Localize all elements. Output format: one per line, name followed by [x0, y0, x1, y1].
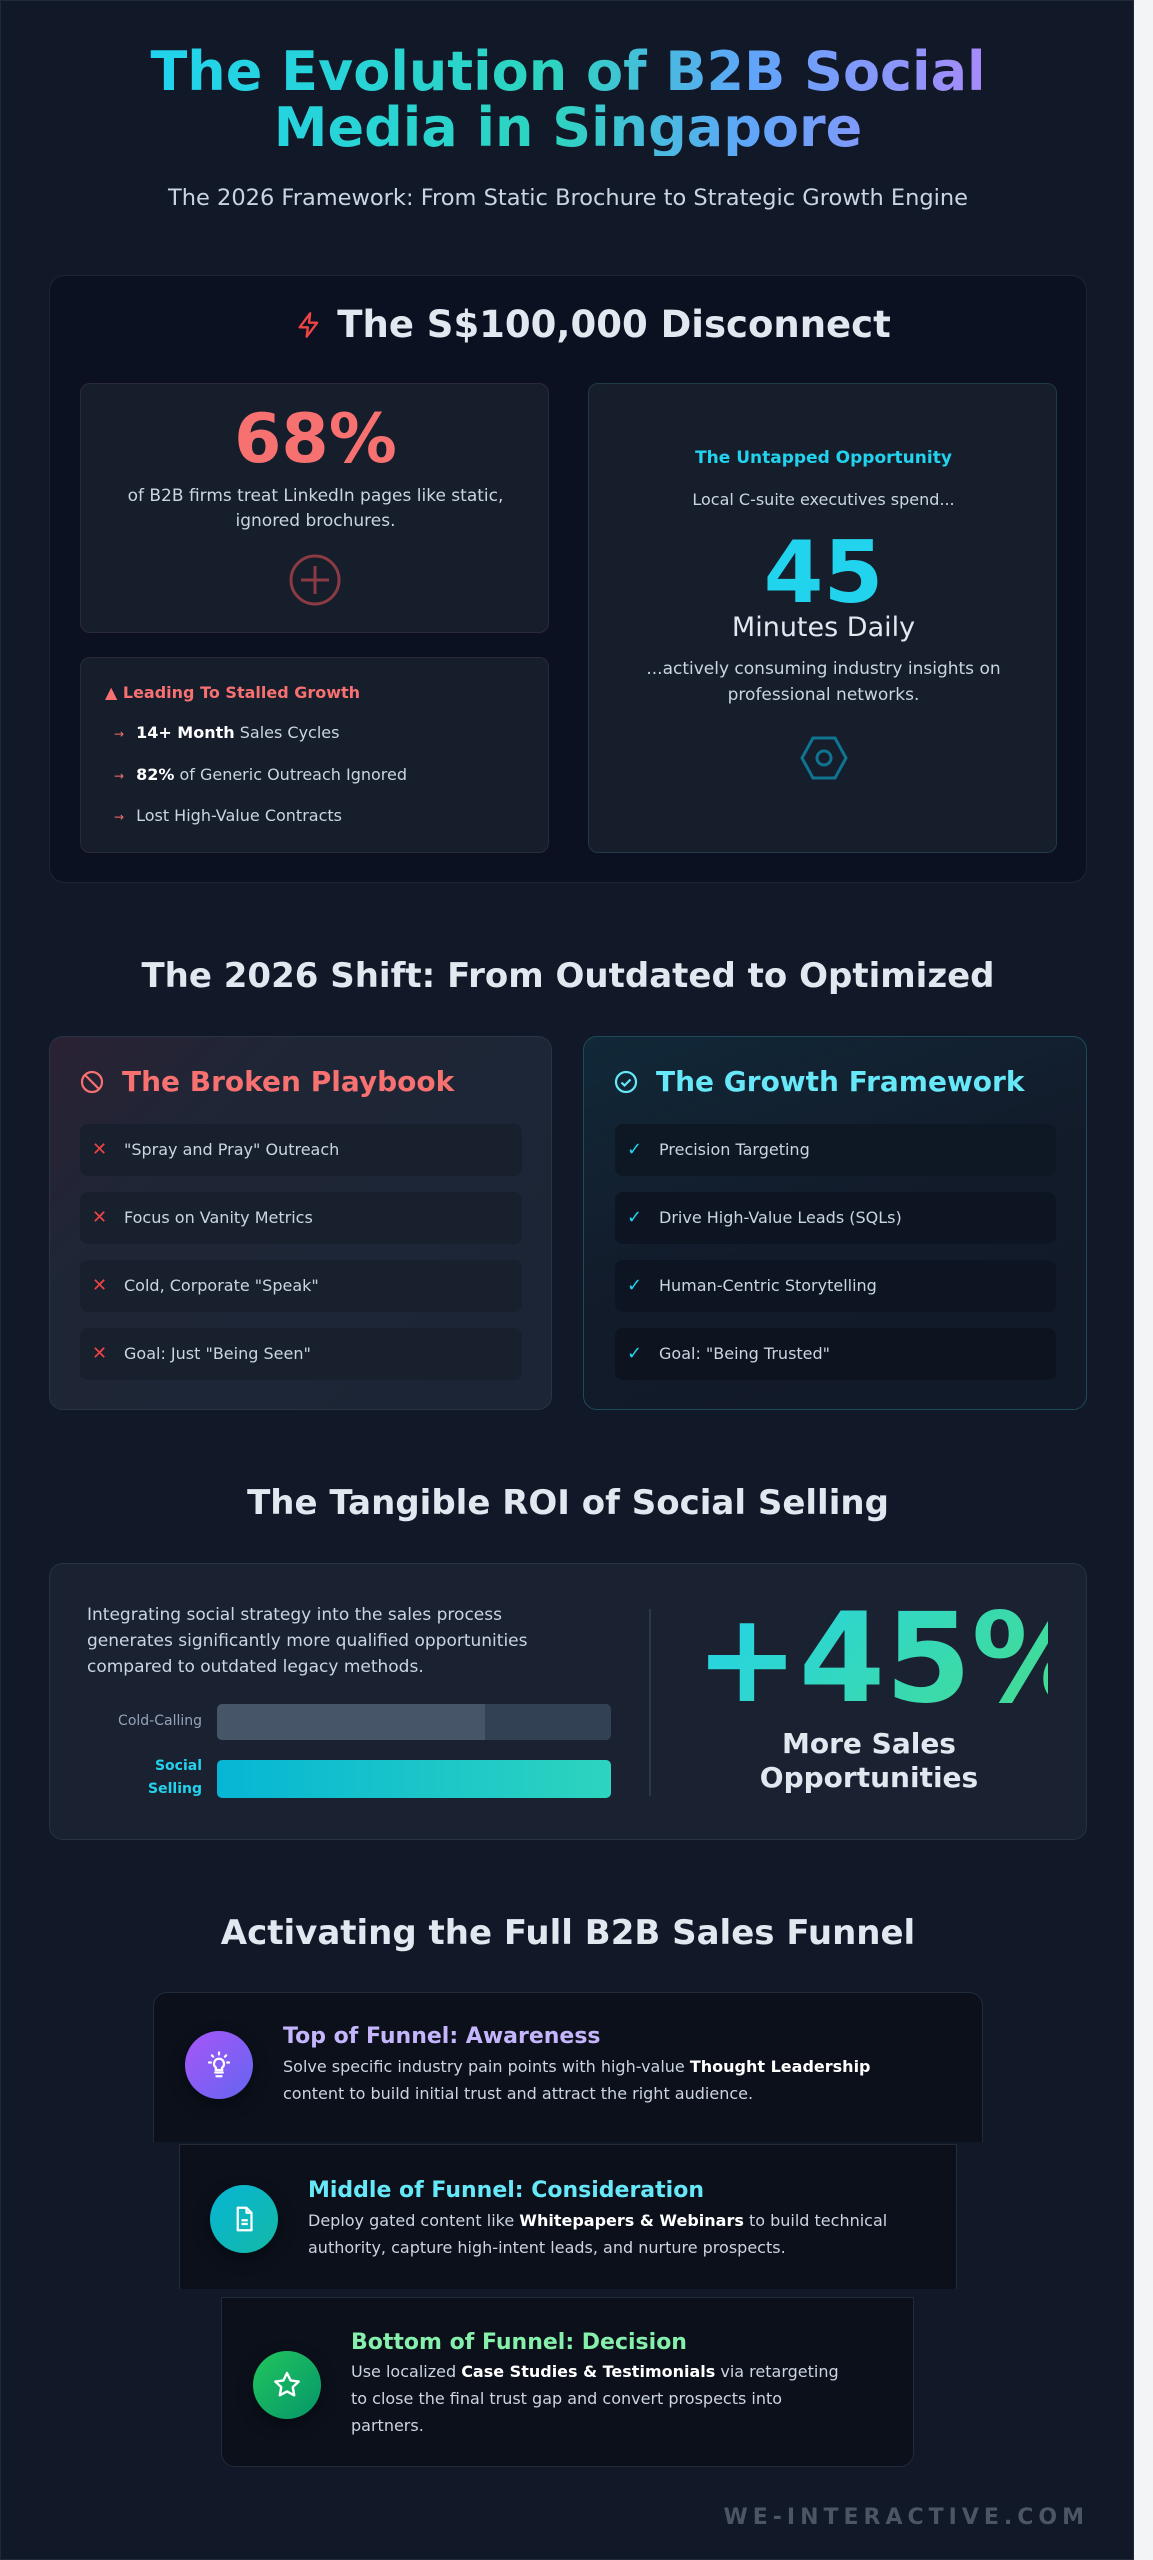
- text: middle: Middle of Funnel: Consideration: [308, 2178, 704, 2203]
- panel: disconnect: [49, 275, 1087, 883]
- bar chart: Social: [155, 1758, 202, 1774]
- list: growth items: Goal: "Being Trusted": [659, 1344, 830, 1363]
- heading: stalled: ▲ Leading To Stalled Growth: [105, 683, 360, 702]
- bar chart: Selling: [148, 1781, 202, 1797]
- stat text: of B2B firms treat LinkedIn pages like static, ignored brochures.: [128, 486, 503, 531]
- list: stalled items: → 14+ Month Sales Cycles: [114, 723, 339, 742]
- list: stalled items: → 82% of Generic Outreach Ignored: [114, 764, 407, 784]
- panel: broken playbook: [49, 1036, 552, 1410]
- list: stalled items: → Lost High-Value Contracts: [114, 806, 342, 825]
- card: 68% stat: [80, 383, 549, 633]
- list: growth items: Precision Targeting: [659, 1140, 810, 1159]
- card: 45 minutes: ...actively consuming industry insights on professional networks.: [646, 659, 1001, 705]
- list: stalled items: [114, 723, 407, 825]
- footer: WE-INTERACTIVE.COM: [723, 2505, 1089, 2530]
- heading: 2026 shift: The 2026 Shift: From Outdated to Optimized: [141, 956, 995, 996]
- funnel: bottom: [221, 2297, 914, 2467]
- heading: funnel: Activating the Full B2B Sales Funnel: [221, 1913, 915, 1953]
- list: broken items: [80, 1124, 522, 1376]
- list: broken items: ✕: [92, 1275, 107, 1296]
- stat number: 68%: [234, 400, 397, 479]
- list: broken items: ✕: [92, 1343, 107, 1364]
- label: more sales: Opportunities: [760, 1761, 978, 1794]
- bar chart: Cold-Calling: [118, 1713, 202, 1729]
- title: Media in Singapore: [274, 96, 862, 159]
- stat: 45: 45: [764, 523, 883, 623]
- list: growth items: Drive High-Value Leads (SQLs): [659, 1208, 902, 1227]
- icon: hexagon: [800, 736, 848, 780]
- card: 45 minutes: Local C-suite executives spend...: [692, 490, 955, 509]
- label: more sales: More Sales: [782, 1727, 956, 1760]
- funnel: bottom: Use localized Case Studies & Testimonials via retargeting to close the final trust gap and convert prospects into partners.: [351, 2362, 839, 2435]
- heading: disconnect: The S$100,000 Disconnect: [337, 303, 891, 346]
- list: growth items: ✓: [627, 1207, 642, 1228]
- card: 45 minutes: Minutes Daily: [732, 612, 915, 643]
- card: stalled growth: [80, 657, 549, 853]
- icon: lightbulb: [185, 2031, 253, 2099]
- subtitle: The 2026 Framework: From Static Brochure to Strategic Growth Engine: [168, 185, 968, 211]
- funnel: middle: [179, 2144, 957, 2289]
- list: broken items: ✕: [92, 1139, 107, 1160]
- label: more sales: [760, 1727, 978, 1794]
- list: growth items: ✓: [627, 1343, 642, 1364]
- title: [150, 40, 986, 159]
- list: broken items: Cold, Corporate "Speak": [124, 1276, 319, 1295]
- list: broken items: Focus on Vanity Metrics: [124, 1208, 313, 1227]
- bar chart: [118, 1704, 611, 1798]
- list: growth items: ✓: [627, 1139, 642, 1160]
- text: top: Top of Funnel: Awareness: [283, 2024, 601, 2049]
- title: The Evolution of B2B Social: [150, 40, 986, 103]
- label: untapped: The Untapped Opportunity: [695, 448, 952, 468]
- funnel: top: [153, 1992, 983, 2142]
- heading: ROI: The Tangible ROI of Social Selling: [247, 1483, 889, 1523]
- funnel: top: Solve specific industry pain points with high-value Thought Leadership content to build initial trust and attract the right audience.: [283, 2057, 870, 2103]
- panel: ROI: [49, 1563, 1087, 1840]
- list: broken items: ✕: [92, 1207, 107, 1228]
- list: broken items: Goal: Just "Being Seen": [124, 1344, 311, 1363]
- list: growth items: Human-Centric Storytelling: [659, 1276, 877, 1295]
- text: bottom: Bottom of Funnel: Decision: [351, 2330, 687, 2355]
- list: broken items: "Spray and Pray" Outreach: [124, 1140, 339, 1159]
- list: growth items: [615, 1124, 1056, 1380]
- heading: growth framework: The Growth Framework: [656, 1065, 1024, 1098]
- icon: star: [253, 2351, 321, 2419]
- icon: document: [210, 2185, 278, 2253]
- card: 45 minutes: [588, 383, 1057, 853]
- heading: broken playbook: The Broken Playbook: [122, 1065, 454, 1098]
- text: ROI description: Integrating social strategy into the sales process generates significantly more qualified opportunities compared to outdated legacy methods.: [87, 1605, 528, 1677]
- funnel: middle: Deploy gated content like Whitepapers & Webinars to build technical authority, capture high-intent leads, and nurture prospects.: [308, 2211, 887, 2257]
- icon: plus circle: [290, 554, 340, 606]
- panel: growth framework: [583, 1036, 1087, 1410]
- list: growth items: ✓: [627, 1275, 642, 1296]
